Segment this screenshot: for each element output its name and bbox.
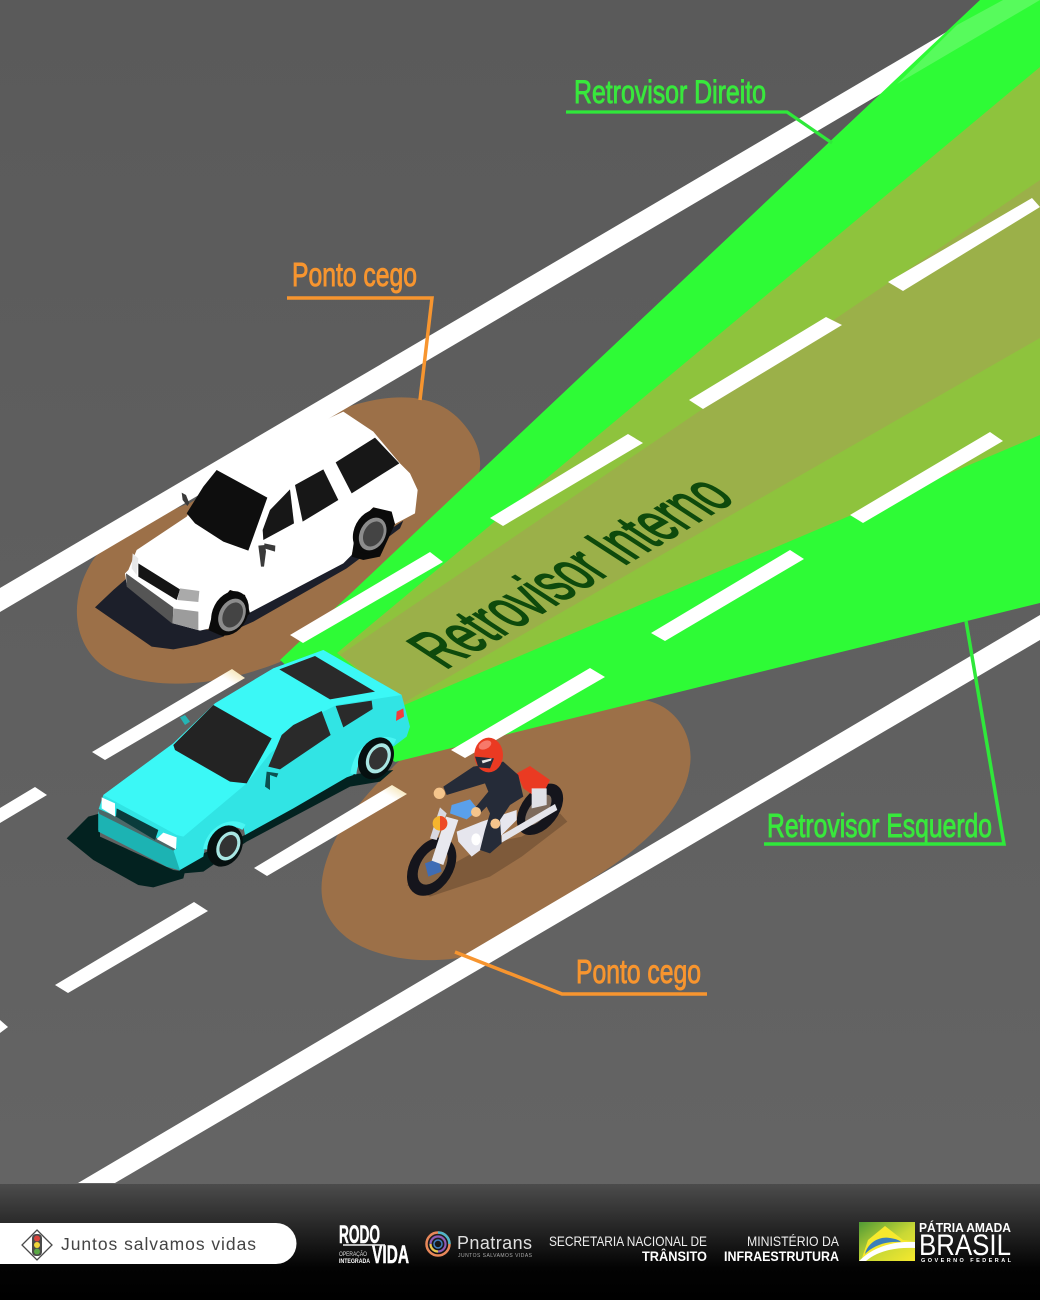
- logo: Pnatrans: Pnatrans: [457, 1233, 532, 1253]
- slogan text: Juntos salvamos vidas: [61, 1234, 256, 1254]
- label: Ponto cego lower: Ponto cego: [576, 953, 701, 990]
- logo: Rodo Vida: VIDA: [372, 1241, 409, 1269]
- label: Ponto cego lower: [455, 952, 707, 994]
- logo: Pnatrans: [426, 1232, 533, 1259]
- footer band: [0, 1184, 1040, 1300]
- label: Retrovisor Direito: [566, 74, 832, 143]
- blind spot area around white car: [77, 397, 480, 684]
- icon: traffic light sign: [22, 1230, 52, 1260]
- logo: Pátria Amada Brasil: PÁTRIA AMADA: [919, 1220, 1011, 1235]
- cyan car: [67, 650, 410, 887]
- icon: Pnatrans rings: [426, 1232, 450, 1256]
- text: Secretaria Nacional de Trânsito: TRÂNSITO: [642, 1247, 707, 1264]
- logo: Rodo Vida: [339, 1221, 409, 1269]
- left road edge line: [78, 615, 1040, 1183]
- blind spot area around motorcycle: [321, 699, 691, 960]
- label: Retrovisor Interno: Retrovisor Interno: [390, 464, 750, 678]
- overlap of interior mirror cone: [340, 180, 1040, 702]
- mirror vision cones: [280, 0, 1040, 762]
- logo: Pátria Amada Brasil: [919, 1220, 1012, 1264]
- white car: [95, 412, 418, 649]
- logo: Rodo Vida: OPERAÇÃO: [339, 1249, 367, 1258]
- text: Ministério da Infraestrutura: INFRAESTRUTURA: [724, 1248, 839, 1264]
- interior mirror cone: [337, 67, 1040, 706]
- logo: Rodo Vida: RODO: [339, 1221, 380, 1249]
- slogan pill: [0, 1223, 296, 1264]
- text: Ministério da Infraestrutura: MINISTÉRIO DA: [747, 1233, 840, 1249]
- text: Ministério da Infraestrutura: [724, 1233, 840, 1264]
- label: Ponto cego upper: Ponto cego: [292, 256, 417, 293]
- lane dashes: [0, 198, 1040, 1033]
- logo: Pátria Amada Brasil: BRASIL: [919, 1229, 1011, 1262]
- label: Retrovisor Esquerdo: [764, 621, 1004, 844]
- motorcycle and rider: [397, 738, 573, 905]
- label: Ponto cego upper: [287, 256, 432, 400]
- mirror cone highlight: [897, 0, 1040, 84]
- right and left mirror field of view: [280, 0, 1040, 762]
- logo: Pátria Amada Brasil: GOVERNO FEDERAL: [921, 1258, 1012, 1264]
- logo: Rodo Vida: INTEGRADA: [339, 1258, 370, 1265]
- right road edge line: [0, 0, 1040, 612]
- logo: Brasil flag mark: [859, 1222, 915, 1261]
- logo: Pnatrans: JUNTOS SALVAMOS VIDAS: [458, 1253, 533, 1259]
- text: Secretaria Nacional de Trânsito: SECRETARIA NACIONAL DE: [549, 1233, 707, 1249]
- text: Secretaria Nacional de Trânsito: [549, 1233, 707, 1264]
- label: Retrovisor Direito: Retrovisor Direito: [574, 74, 766, 110]
